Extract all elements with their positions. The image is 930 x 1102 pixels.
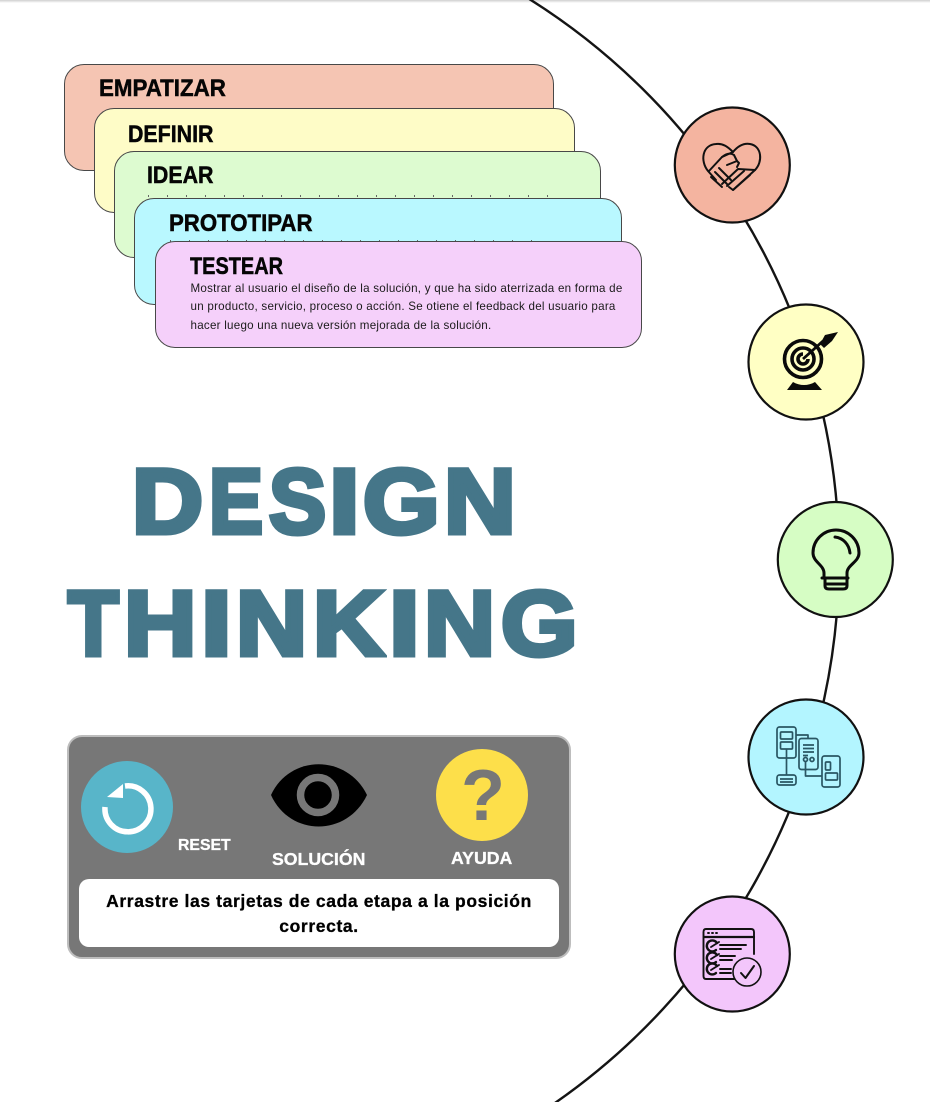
title: thinking <box>66 573 578 675</box>
heading: prototipar: PROTOTIPAR <box>169 210 312 237</box>
arc connector line <box>528 0 839 1102</box>
text: G <box>362 451 439 553</box>
panel: controls <box>67 735 571 959</box>
label: ayuda: AYUDA <box>451 848 512 868</box>
card: testear <box>155 241 642 348</box>
card body text: hacer luego una nueva versión mejorada de la solución. <box>190 319 491 332</box>
instruction box: correcta. <box>279 916 359 936</box>
text: G <box>501 573 578 675</box>
card: prototipar <box>134 198 622 304</box>
text: I <box>329 451 360 553</box>
icon: help button <box>436 749 528 841</box>
card body text <box>190 282 623 332</box>
card body text: Mostrar al usuario el diseño de la solución, y que ha sido aterrizada en forma de <box>190 282 623 294</box>
card: idear <box>114 151 600 258</box>
stage icon: testear checklist <box>675 896 790 1012</box>
text: E <box>209 451 263 553</box>
stage icon: prototipar flow diagram <box>748 700 864 814</box>
text: N <box>236 573 307 675</box>
title: design <box>132 451 515 553</box>
heading: idear: IDEAR <box>147 162 213 189</box>
text: D <box>132 451 203 553</box>
heading: empatizar: EMPATIZAR <box>99 75 226 102</box>
text: I <box>201 573 232 675</box>
text: T <box>68 573 118 675</box>
card: definir <box>94 108 574 212</box>
icon: help button: ? <box>461 756 505 836</box>
card body text: un producto, servicio, proceso o acción. Se otiene el feedback del usuario para <box>190 300 616 313</box>
text: I <box>389 573 420 675</box>
card: empatizar <box>64 64 554 170</box>
text: H <box>124 573 196 675</box>
instruction box: Arrastre las tarjetas de cada etapa a la posición <box>106 891 532 911</box>
stage icon: idear light bulb <box>778 502 893 617</box>
instruction box <box>79 879 559 947</box>
label: reset: RESET <box>178 837 231 854</box>
text: K <box>313 573 384 675</box>
text: N <box>424 573 495 675</box>
heading: definir: DEFINIR <box>128 121 213 148</box>
icon: eye solution button <box>271 764 367 826</box>
label: solucion: SOLUCIÓN <box>272 849 365 869</box>
heading: testear: TESTEAR <box>190 252 282 280</box>
text: N <box>444 451 515 553</box>
icon: reset button <box>81 761 173 853</box>
text: S <box>268 451 326 553</box>
stage icon: empatizar handshake heart <box>675 108 790 222</box>
stage icon: definir target <box>748 304 864 420</box>
